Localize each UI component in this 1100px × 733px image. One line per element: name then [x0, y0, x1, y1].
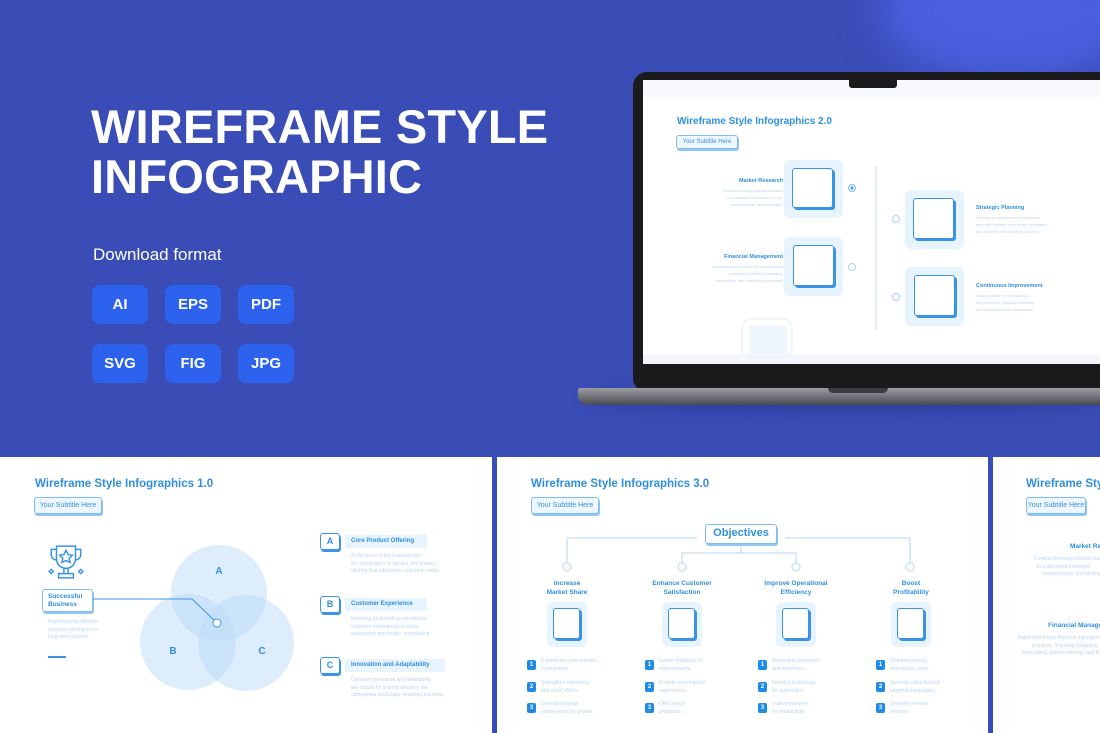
item: market research: to understand consumer needs, — [727, 195, 783, 200]
column 1: and sales efforts. — [541, 688, 579, 694]
list A: At the heart of the business lies — [351, 553, 421, 559]
column 4: 3 — [879, 705, 882, 711]
list B — [320, 596, 430, 637]
item: continuous improvement: and refining business processes. — [976, 307, 1034, 312]
column 2: Provide personalized — [659, 680, 706, 686]
column 4: streams. — [890, 708, 909, 714]
item: continuous improvement — [905, 267, 1043, 326]
column 2: Gather feedback for — [659, 658, 703, 664]
column 2: Satisfaction — [664, 589, 700, 596]
column 4: Optimize pricing — [890, 658, 926, 664]
column 3: Streamline processes — [772, 658, 820, 664]
format buttons: AI — [112, 296, 128, 313]
panel: infographics 2.0 (partial): practices, including budgeting — [1032, 642, 1098, 648]
column 4: 1 — [879, 662, 882, 668]
panel: infographics 1.0: Wireframe Style Infographics 1.0 — [35, 478, 213, 490]
item: continuous improvement: Adopt a culture of continuous — [976, 293, 1028, 298]
objectives box: Objectives — [713, 527, 769, 539]
column 3: for productivity. — [772, 708, 806, 714]
column 3: 2 — [761, 684, 764, 690]
item: financial: practices, including budgeting, — [729, 271, 783, 276]
column 3: 1 — [761, 662, 764, 668]
column 3: for automation. — [772, 688, 805, 694]
column 2: Enhance Customer — [652, 580, 712, 587]
panel: infographics 2.0 (partial) — [993, 457, 1100, 733]
column 4: targeted campaigns. — [890, 688, 935, 694]
venn diagram — [93, 545, 294, 691]
format buttons: EPS — [178, 296, 208, 313]
column 2: 2 — [648, 684, 651, 690]
panel: infographics 3.0 — [497, 457, 988, 733]
list B: Focusing on providing exceptional — [351, 616, 427, 622]
column 1: 2 — [530, 684, 533, 690]
laptop screen — [643, 80, 1100, 364]
item: strategic planning — [905, 190, 1047, 249]
title: WIREFRAME STYLE — [91, 100, 548, 153]
column 3: Train employees — [772, 701, 809, 707]
icon: trophy — [48, 545, 84, 579]
column 1: Develop strategic — [541, 701, 580, 707]
format buttons: SVG — [104, 355, 136, 372]
column 2: improvements. — [659, 666, 692, 672]
column 2: 3 — [648, 705, 651, 711]
item: strategic planning: plan that outlines clear goals, strategies, — [976, 222, 1047, 227]
column 3: Invest in technology — [772, 680, 816, 686]
item: strategic planning: Strategic Planning — [976, 205, 1024, 211]
format buttons: JPG — [251, 355, 281, 372]
panel: infographics 1.0: Your Subtitle Here — [40, 502, 96, 509]
item: market research — [721, 160, 843, 218]
column 3: Improve Operational — [764, 580, 828, 587]
column 3: and workflows. — [772, 666, 805, 672]
item: financial: Financial Management — [724, 254, 783, 260]
item: financial: forecasting, and monitoring cash flow. — [716, 278, 783, 283]
connector lines — [562, 537, 915, 572]
column 1 — [527, 580, 597, 714]
column 2: Offer loyalty — [659, 701, 686, 707]
download format label: Download format — [93, 245, 222, 264]
screen subtitle: Your Subtitle Here — [683, 139, 731, 145]
item: continuous improvement: Continuous Improvement — [976, 283, 1043, 289]
screen subtitle — [676, 135, 738, 149]
column 2: programs. — [659, 708, 682, 714]
laptop — [578, 72, 1100, 414]
panel: infographics 3.0: Your Subtitle Here — [537, 502, 593, 509]
list C: Constant innovation and adaptability — [351, 677, 432, 683]
item: market research: Conduct thorough market research — [721, 188, 783, 193]
list C: competitive landscape, enabling business — [351, 692, 443, 698]
venn diagram: A — [215, 566, 223, 577]
item: financial: Implement sound financial management — [712, 264, 783, 269]
list B: satisfaction and loyalty, contributing — [351, 631, 430, 637]
column 2 — [645, 580, 712, 714]
venn diagram: B — [169, 646, 177, 657]
column 1: 3 — [530, 705, 533, 711]
item: continuous improvement: improvement, regularly reviewing — [976, 300, 1035, 305]
list B: customer experiences ensures — [351, 624, 419, 630]
column 1: partnerships for growth. — [541, 708, 594, 714]
list A: A — [327, 536, 333, 546]
column 1: Strengthen marketing — [541, 680, 589, 686]
format buttons: FIG — [180, 355, 206, 372]
title — [91, 100, 548, 203]
list A: offering that addresses customer needs. — [351, 568, 440, 574]
label: successful business: Successful — [48, 593, 82, 600]
item: strategic planning: and timelines for achieving success. — [976, 229, 1040, 234]
list C: Innovation and Adaptability — [351, 662, 429, 668]
label: successful business: Business — [48, 600, 77, 608]
column 1: Increase — [554, 580, 580, 587]
column 4: Boost — [902, 580, 920, 587]
panel: infographics 2.0 (partial): Your Subtitle Here — [1028, 502, 1084, 509]
column 4 — [876, 580, 941, 714]
column 1: Expand into new markets — [541, 658, 597, 664]
background glow — [880, 0, 1100, 80]
column 3: 3 — [761, 705, 764, 711]
title: INFOGRAPHIC — [91, 150, 422, 203]
panel: infographics 1.0: long-term success. — [48, 634, 90, 640]
list B: Customer Experience — [351, 601, 413, 607]
item: market research: market trends, and strategies. — [730, 202, 783, 207]
objectives box — [705, 524, 777, 544]
item: strategic planning: Develop a comprehensive business — [976, 215, 1039, 220]
column 4: Profitability — [893, 589, 929, 596]
list C — [320, 657, 445, 698]
column 2: 1 — [648, 662, 651, 668]
column 2: experiences. — [659, 688, 687, 694]
format buttons: PDF — [251, 296, 281, 313]
column 4: Diversify revenue — [890, 701, 929, 707]
column 1: 1 — [530, 662, 533, 668]
column 4: 2 — [879, 684, 882, 690]
list B: B — [327, 599, 333, 609]
item: market research: Market Research — [739, 178, 783, 184]
column 1: or segments. — [541, 666, 570, 672]
panel: infographics 2.0 (partial): to understand consumer — [1037, 564, 1091, 570]
screen title: Wireframe Style Infographics 2.0 — [677, 116, 832, 127]
list A — [320, 533, 440, 574]
list C: C — [327, 660, 333, 670]
panel: infographics 1.0: Implementing effective — [48, 619, 98, 625]
item: financial — [712, 237, 843, 296]
format buttons — [92, 285, 294, 383]
column 4: and reduce costs. — [890, 666, 929, 672]
list A: Core Product Offering — [351, 538, 414, 544]
panel: infographics 3.0: Wireframe Style Infographics 3.0 — [531, 478, 709, 490]
venn diagram: C — [258, 646, 266, 657]
panel: infographics 1.0: business strategies for — [48, 626, 98, 632]
column 3: Efficiency — [781, 589, 811, 596]
list A: its core product or service, the primary — [351, 560, 436, 566]
label: successful business — [42, 589, 93, 612]
column 3 — [758, 580, 828, 714]
panel: infographics 1.0 — [0, 457, 492, 733]
column 4: Increase sales through — [890, 680, 941, 686]
list C: are crucial for staying ahead in the — [351, 684, 427, 690]
column 1: Market Share — [547, 589, 587, 596]
